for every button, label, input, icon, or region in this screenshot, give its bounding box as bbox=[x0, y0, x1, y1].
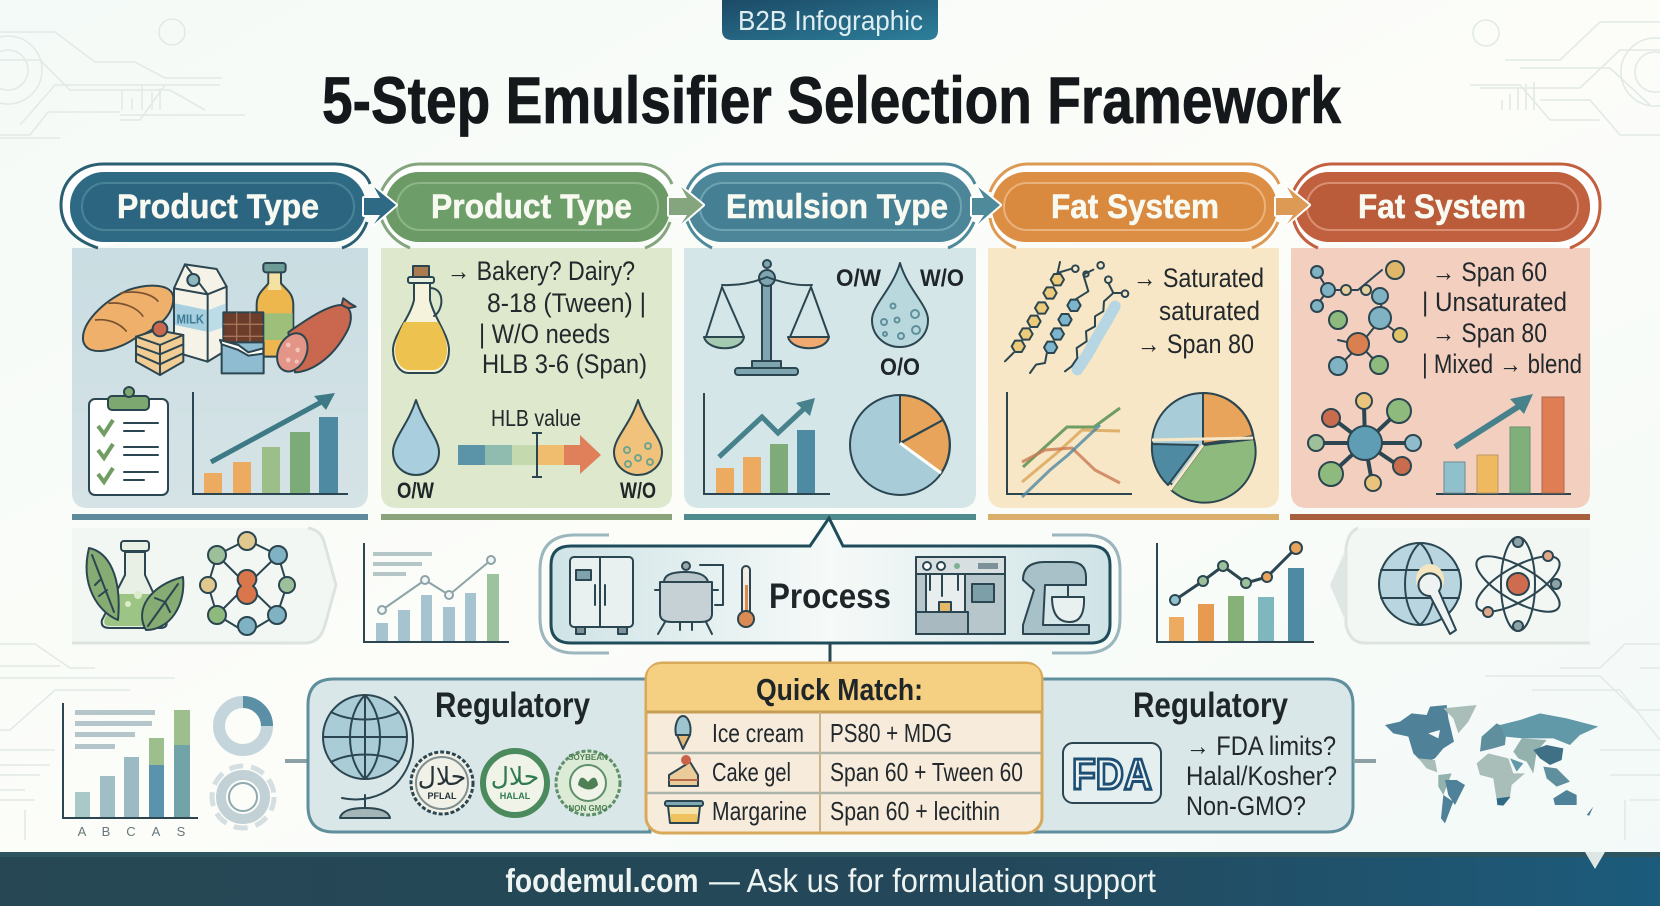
text: span rules: → Span 60 bbox=[1432, 257, 1547, 287]
icon: emulsion droplet with labels bbox=[836, 263, 964, 381]
table text: Span 60 + Tween 60 bbox=[830, 757, 1023, 787]
icon: O/W droplet: O/W bbox=[397, 478, 434, 503]
footer text: — Ask us for formulation support bbox=[709, 862, 1156, 899]
icon: non-GMO seal: NON GMO bbox=[568, 804, 608, 813]
icon: halal seal 1: PFLAL bbox=[428, 791, 457, 801]
text: fat system rules: → Saturated bbox=[1133, 263, 1264, 293]
icon: atom bbox=[1469, 537, 1567, 631]
title: 5-Step Emulsifier Selection Framework bbox=[322, 63, 1341, 137]
text: fat system rules: saturated bbox=[1159, 296, 1260, 326]
icon: halal seal 1 bbox=[411, 752, 473, 814]
icon: W/O droplet bbox=[614, 400, 662, 503]
regulatory heading: Regulatory bbox=[435, 686, 590, 725]
text: span rules bbox=[1422, 257, 1582, 379]
panel: step 2 HLB bbox=[381, 164, 672, 508]
step 5 header: Fat System bbox=[1358, 188, 1526, 226]
text: fat system rules: → Span 80 bbox=[1137, 329, 1254, 359]
arrow: step 3 to 4 bbox=[972, 187, 1000, 224]
icon: halal seal 1: حلال bbox=[418, 762, 466, 791]
icon: halal seal 2: حلال bbox=[491, 762, 539, 791]
icon: oil bottle bbox=[393, 266, 449, 373]
step 1 header: Product Type bbox=[117, 188, 319, 226]
icon: non-GMO seal bbox=[556, 751, 620, 815]
step 1 header bbox=[61, 164, 370, 248]
icon: checklist clipboard bbox=[89, 387, 168, 495]
icon: cake slice bbox=[669, 755, 698, 786]
process label: Process bbox=[769, 577, 891, 616]
icon: emulsion droplet with labels: W/O bbox=[920, 265, 964, 292]
line chart bbox=[1007, 392, 1132, 497]
panel: process bbox=[540, 518, 1120, 653]
bar chart with arrow bbox=[193, 392, 348, 494]
panel: globe and atom bbox=[1330, 528, 1590, 643]
text: HLB questions: HLB 3-6 (Span) bbox=[482, 349, 647, 379]
table text: Span 60 + lecithin bbox=[830, 796, 1000, 826]
icon: emulsion droplet with labels: O/O bbox=[880, 354, 920, 381]
icon: FDA badge: FDA bbox=[1072, 750, 1152, 799]
quick match heading: Quick Match: bbox=[756, 672, 923, 707]
table text: Margarine bbox=[712, 796, 807, 826]
icon: W/O droplet: W/O bbox=[620, 478, 656, 503]
bar chart with zigzag arrow bbox=[704, 393, 830, 494]
chart: bars and line left bbox=[364, 543, 509, 642]
icon: world map bbox=[1385, 705, 1598, 823]
panel: flask and molecule bbox=[72, 528, 336, 643]
panel: step 5 fat system blends bbox=[1291, 164, 1600, 508]
regulatory heading: Regulatory bbox=[1133, 686, 1288, 725]
bar chart with arrow bbox=[1436, 394, 1571, 494]
icon: food products bbox=[83, 263, 356, 376]
HLB value scale arrow bbox=[458, 405, 601, 477]
icon: stand mixer bbox=[1023, 562, 1089, 634]
chart: lower-left bars: S bbox=[177, 824, 186, 839]
text: HLB questions: → Bakery? Dairy? bbox=[447, 256, 635, 286]
arrow: step 2 to 3 bbox=[669, 187, 703, 224]
icon: flask with leaves bbox=[87, 541, 183, 630]
step 5 header bbox=[1293, 164, 1600, 248]
pie chart bbox=[1152, 393, 1256, 503]
icon: donut chart bbox=[219, 702, 267, 750]
connector: process to quick match bbox=[828, 643, 832, 664]
text: span rules: | Mixed → blend bbox=[1422, 349, 1582, 379]
icon: thermometer bbox=[738, 566, 754, 627]
icon: globe on stand bbox=[323, 695, 413, 818]
text: span rules: → Span 80 bbox=[1432, 318, 1547, 348]
footer text: foodemul.com bbox=[506, 862, 698, 899]
chart: bars and line right bbox=[1157, 542, 1314, 642]
icon: molecule bbox=[1311, 261, 1407, 375]
decoration: lower-right circuit bbox=[1485, 644, 1660, 840]
icon: globe with spoon bbox=[1379, 543, 1461, 634]
HLB value scale arrow: HLB value bbox=[491, 405, 581, 431]
icon: emulsion droplet with labels: O/W bbox=[836, 265, 881, 292]
arrow: step 1 to 2 bbox=[364, 187, 396, 224]
text: regulatory questions: Halal/Kosher? bbox=[1186, 761, 1337, 791]
step 2 header bbox=[381, 164, 672, 248]
connector: chart to regulatory bbox=[285, 759, 308, 763]
icon: gear bbox=[212, 766, 274, 828]
icon: O/W droplet bbox=[393, 400, 439, 503]
panel: step 1 product type bbox=[61, 164, 370, 508]
pie chart bbox=[850, 395, 950, 495]
icon: margarine tub bbox=[665, 801, 703, 823]
icon: halal seal 2: HALAL bbox=[500, 791, 531, 801]
icon: refrigerator bbox=[570, 557, 633, 634]
footer bbox=[0, 852, 1660, 906]
panel: step 3 emulsion type bbox=[684, 164, 976, 508]
icon: food products: MILK bbox=[177, 311, 204, 326]
step 3 header bbox=[686, 164, 975, 248]
text: span rules: | Unsaturated bbox=[1422, 287, 1567, 317]
text: HLB questions: | W/O needs bbox=[479, 319, 610, 349]
decoration: top-right circuit bbox=[1470, 20, 1660, 135]
chart: lower-left bars: C bbox=[126, 824, 136, 839]
icon: molecule network bbox=[200, 532, 295, 635]
underline bars bbox=[72, 514, 1590, 520]
decoration: top-left circuit bbox=[0, 19, 245, 138]
table text: Cake gel bbox=[712, 757, 791, 787]
table text bbox=[712, 718, 1023, 826]
step 4 header bbox=[990, 164, 1279, 248]
panel: quick match table bbox=[646, 663, 1042, 833]
chart: lower-left bars: A bbox=[78, 824, 87, 839]
text: HLB questions bbox=[447, 256, 647, 379]
text: regulatory questions: Non-GMO? bbox=[1186, 791, 1306, 821]
step 3 header: Emulsion Type bbox=[726, 188, 948, 226]
chart: lower-left bars: B bbox=[102, 824, 110, 839]
panel: regulatory left bbox=[308, 679, 650, 832]
text: regulatory questions: → FDA limits? bbox=[1186, 731, 1336, 761]
icon: fatty acid chains bbox=[1005, 262, 1128, 373]
chart: lower-left bars: A bbox=[152, 824, 161, 839]
arrow: step 4 to 5 bbox=[1276, 187, 1309, 224]
icon: production machine bbox=[916, 557, 1005, 634]
icon: ice cream bbox=[675, 716, 691, 749]
icon: balance scale bbox=[704, 260, 829, 375]
panel: regulatory right bbox=[1035, 679, 1353, 832]
icon: pressure pot bbox=[655, 562, 723, 634]
badge: B2B Infographic: B2B Infographic bbox=[738, 5, 923, 36]
step 2 header: Product Type bbox=[431, 188, 632, 226]
step 4 header: Fat System bbox=[1051, 188, 1219, 226]
panel: step 4 fat system bbox=[988, 164, 1279, 508]
text: HLB questions: 8-18 (Tween) | bbox=[487, 288, 646, 318]
icon: non-GMO seal: SOYBEAN bbox=[568, 753, 608, 762]
table text: PS80 + MDG bbox=[830, 718, 952, 748]
table text: Ice cream bbox=[712, 718, 804, 748]
chart: lower-left bars bbox=[63, 703, 198, 839]
icon: radial molecule bbox=[1308, 393, 1421, 491]
text: regulatory questions bbox=[1186, 731, 1337, 821]
icon: halal seal 2 bbox=[483, 751, 547, 815]
connector: regulatory to map bbox=[1353, 759, 1376, 763]
decoration: lower-left circuit bbox=[0, 644, 175, 840]
text: fat system rules bbox=[1133, 263, 1264, 359]
